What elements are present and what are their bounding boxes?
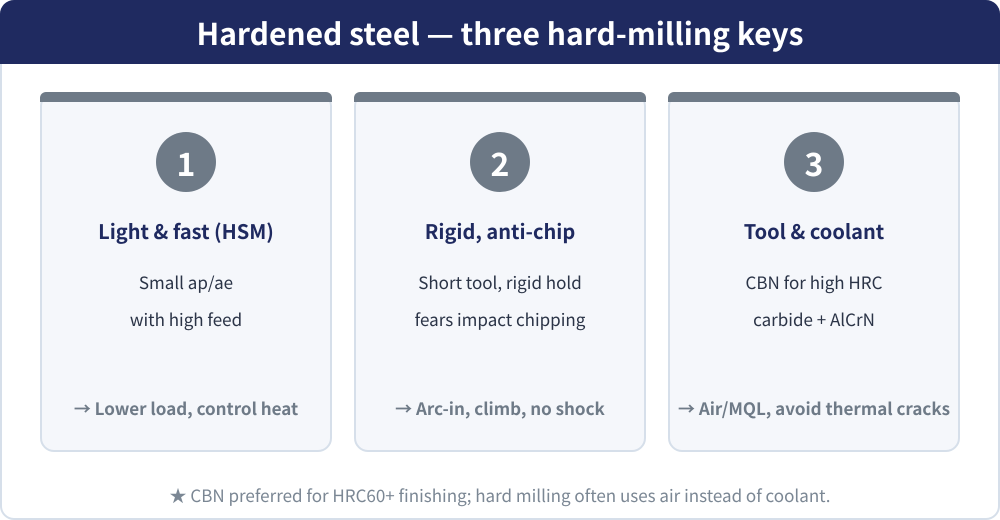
number badge 3: 3 [805, 140, 823, 186]
heading: key 2: Rigid, anti-chip [425, 216, 575, 245]
text: key 3 line 2: carbide + AlCrN [753, 306, 875, 331]
number badge 1: 1 [177, 140, 195, 186]
title: Hardened steel — three hard-milling keys [196, 10, 804, 54]
number badge 2: 2 [491, 140, 509, 186]
number badge 3 [784, 132, 844, 192]
text: key 2 line 1: Short tool, rigid hold [418, 269, 582, 294]
result: key 2: → Arc-in, climb, no shock [395, 395, 605, 420]
panel: key 2 [354, 92, 646, 452]
number badge 2 [470, 132, 530, 192]
result: key 3: → Air/MQL, avoid thermal cracks [678, 395, 950, 420]
heading: key 3: Tool & coolant [744, 216, 884, 245]
text: key 2 line 2: fears impact chipping [415, 306, 585, 331]
text: key 3 line 1: CBN for high HRC [746, 269, 882, 294]
panel: key 3 [668, 92, 960, 452]
panel: key 1 [40, 92, 332, 452]
heading: key 1: Light & fast (HSM) [98, 216, 274, 245]
text: key 1 line 2: with high feed [130, 306, 242, 331]
title [0, 0, 1000, 64]
text: key 1 line 1: Small ap/ae [139, 269, 233, 294]
footnote: ★ CBN preferred for HRC60+ finishing; hard milling often uses air instead of coolant. [170, 482, 830, 507]
result: key 1: → Lower load, control heat [74, 395, 298, 420]
number badge 1 [156, 132, 216, 192]
